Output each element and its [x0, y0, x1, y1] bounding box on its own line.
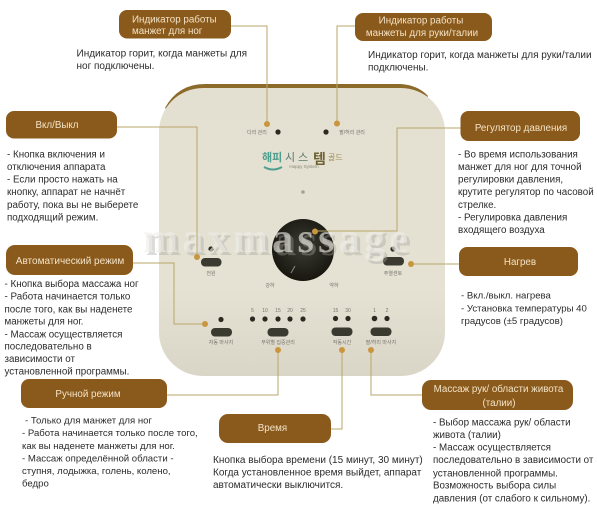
text: pressure regulator: стрелке.: [458, 200, 496, 211]
text: auto mode: зависимости от: [4, 354, 75, 365]
text: power: работу, пока вы не выберете: [7, 200, 139, 211]
badge: heat: [459, 247, 578, 276]
text: manual mode: как вы наденете манжеты для ног.: [22, 441, 175, 452]
time button and lights: 30: [345, 308, 351, 314]
top-left indicator light: [275, 129, 281, 135]
text: arm massage: Возможность выбора силы: [433, 481, 556, 492]
arm indicator caption: 팔/허리 관리: [339, 129, 365, 136]
watermark: maxmassage: [146, 219, 411, 265]
badge: time: [219, 414, 331, 443]
device logo: 스: [298, 149, 308, 165]
text: power: - Кнопка включения и: [7, 150, 105, 160]
text: pressure regulator: входящего воздуха: [458, 225, 545, 236]
time button and lights: [332, 308, 352, 346]
text: arm massage: давления (от слабого к сильному).: [433, 493, 590, 504]
connector: arm massage: [368, 347, 422, 395]
text: power: отключения аппарата: [7, 162, 106, 173]
text: arm indicator: [368, 50, 592, 74]
device logo: Happy System: [289, 164, 319, 169]
pressure knob: 약하: [329, 282, 339, 289]
power button and light: [201, 246, 222, 277]
connector: arm indicator: [334, 26, 355, 126]
pressure knob: 강하: [265, 282, 275, 289]
text: power: [7, 150, 139, 224]
text: arm massage: - Выбор массажа рук/ области: [433, 418, 571, 429]
small center mark: [301, 190, 305, 194]
badge: power: [6, 111, 117, 138]
text: leg indicator: Индикатор горит, когда манжеты для: [76, 48, 247, 60]
badge: time: Время: [258, 423, 287, 434]
manual mode button and lights: 5: [251, 308, 254, 314]
text: arm massage: [433, 418, 594, 504]
badge: manual mode: [21, 379, 167, 408]
connector: time: [331, 347, 345, 429]
text: manual mode: бедро: [22, 478, 49, 489]
text: arm massage: последовательно в зависимости от: [433, 455, 594, 466]
text: arm massage: установленной программы.: [433, 468, 558, 479]
device logo: [262, 149, 343, 170]
badge: arm indicator: манжеты для руки/талии: [366, 28, 478, 39]
manual mode button and lights: 10: [262, 308, 268, 314]
arm massage button and lights: [366, 308, 396, 346]
text: power: - Если просто нажать на: [7, 174, 118, 186]
text: auto mode: после того, как вы наденете: [4, 304, 133, 315]
text: auto mode: - Массаж осуществляется: [4, 329, 122, 340]
connector: pressure regulator: [312, 128, 461, 234]
badge: auto mode: Автоматический режим: [16, 256, 124, 267]
text: manual mode: - Только для манжет для ног: [25, 416, 152, 427]
text: pressure regulator: крутите регулятор по часовой: [458, 187, 594, 198]
auto mode button and light: 자동 마사지: [209, 339, 233, 346]
device panel: [159, 84, 445, 376]
text: auto mode: манжеты для ног.: [4, 317, 83, 328]
heat button and light: [383, 246, 404, 277]
badge: leg indicator: манжет для ног: [132, 26, 203, 37]
device logo: 템: [313, 149, 326, 169]
auto mode button and light: [209, 317, 233, 346]
badge: leg indicator: Индикатор работы: [132, 14, 217, 26]
badge: arm massage: [422, 380, 573, 410]
time button and lights: 15: [333, 308, 338, 314]
text: auto mode: [4, 279, 139, 378]
connector: auto mode: [133, 263, 208, 327]
badge: arm massage: Массаж рук/ области живота: [434, 384, 564, 395]
badge: pressure regulator: Регулятор давления: [475, 123, 567, 134]
text: pressure regulator: - Во время использования: [458, 150, 578, 160]
manual mode button and lights: 부위별 집중관리: [261, 339, 295, 346]
device logo: 해피: [262, 149, 282, 165]
text: time: Кнопка выбора времени (15 минут, 30 минут): [213, 454, 423, 466]
manual mode button and lights: 25: [300, 308, 306, 314]
text: auto mode: - Работа начинается только: [4, 292, 131, 303]
badge: arm indicator: [355, 13, 492, 41]
text: time: Когда установленное время выйдет, аппарат: [213, 468, 422, 479]
text: heat: градусов (±5 градусов): [461, 316, 563, 327]
text: leg indicator: [76, 48, 247, 72]
text: auto mode: последовательно в: [4, 342, 92, 353]
text: power: кнопку, аппарат не начнёт: [7, 187, 126, 198]
text: heat: - Установка температуры 40: [461, 303, 587, 314]
text: time: автоматически выключится.: [213, 480, 343, 491]
leg indicator caption: 다리 관리: [247, 129, 267, 136]
top-right indicator light: [323, 129, 329, 135]
heat button and light: 주열센토: [384, 270, 403, 277]
text: arm indicator: Индикатор горит, когда манжеты для руки/талии: [368, 50, 592, 61]
text: arm indicator: подключены.: [368, 63, 428, 74]
text: manual mode: - Работа начинается только после того,: [22, 428, 198, 439]
connector: heat: [408, 261, 459, 267]
badge: arm massage: (талии): [482, 398, 516, 409]
text: auto mode: установленной программы.: [4, 367, 129, 378]
text: leg indicator: ног подключены.: [76, 61, 154, 72]
manual mode button and lights: 15: [275, 308, 281, 314]
badge: manual mode: Ручной режим: [55, 389, 121, 400]
badge: leg indicator: [119, 10, 231, 38]
text: manual mode: - Массаж определённой области -: [22, 453, 174, 464]
connector: leg indicator: [231, 26, 270, 127]
pressure knob: [265, 219, 339, 289]
connector: manual mode: [167, 347, 281, 395]
badge: power: Вкл/Выкл: [35, 120, 79, 131]
connector: power: [117, 127, 200, 260]
badge: heat: Нагрев: [504, 257, 536, 268]
text: pressure regulator: [458, 150, 594, 236]
device logo: 골드: [328, 152, 343, 163]
badge: auto mode: [6, 245, 133, 275]
badge: arm indicator: Индикатор работы: [379, 16, 463, 26]
text: arm massage: живота (талии): [433, 430, 501, 441]
text: heat: [461, 291, 587, 327]
arm massage button and lights: 2: [386, 308, 389, 314]
text: pressure regulator: регулировки давления,: [458, 174, 563, 186]
text: arm massage: - Массаж осуществляется: [433, 442, 551, 453]
text: power: подходящий режим.: [7, 212, 98, 224]
manual mode button and lights: [250, 308, 306, 346]
text: manual mode: [22, 416, 198, 489]
watermark: maxmassage: [143, 216, 408, 262]
manual mode button and lights: 20: [287, 308, 293, 314]
arm massage button and lights: 1: [373, 308, 376, 314]
text: pressure regulator: - Регулировка давления: [458, 212, 567, 224]
text: auto mode: - Кнопка выбора массажа ног: [4, 279, 139, 290]
text: heat: - Вкл./выкл. нагрева: [461, 291, 552, 302]
time button and lights: 작동시간: [333, 339, 352, 346]
device logo: 시: [285, 149, 295, 165]
text: pressure regulator: манжет для ног для точной: [458, 162, 582, 173]
text: manual mode: ступня, лодыжка, голень, колено,: [22, 466, 171, 477]
arm massage button and lights: 팔/허리 마사지: [366, 339, 396, 346]
badge: pressure regulator: [460, 111, 580, 141]
text: time: [213, 454, 423, 491]
power button and light: 전원: [206, 270, 216, 277]
